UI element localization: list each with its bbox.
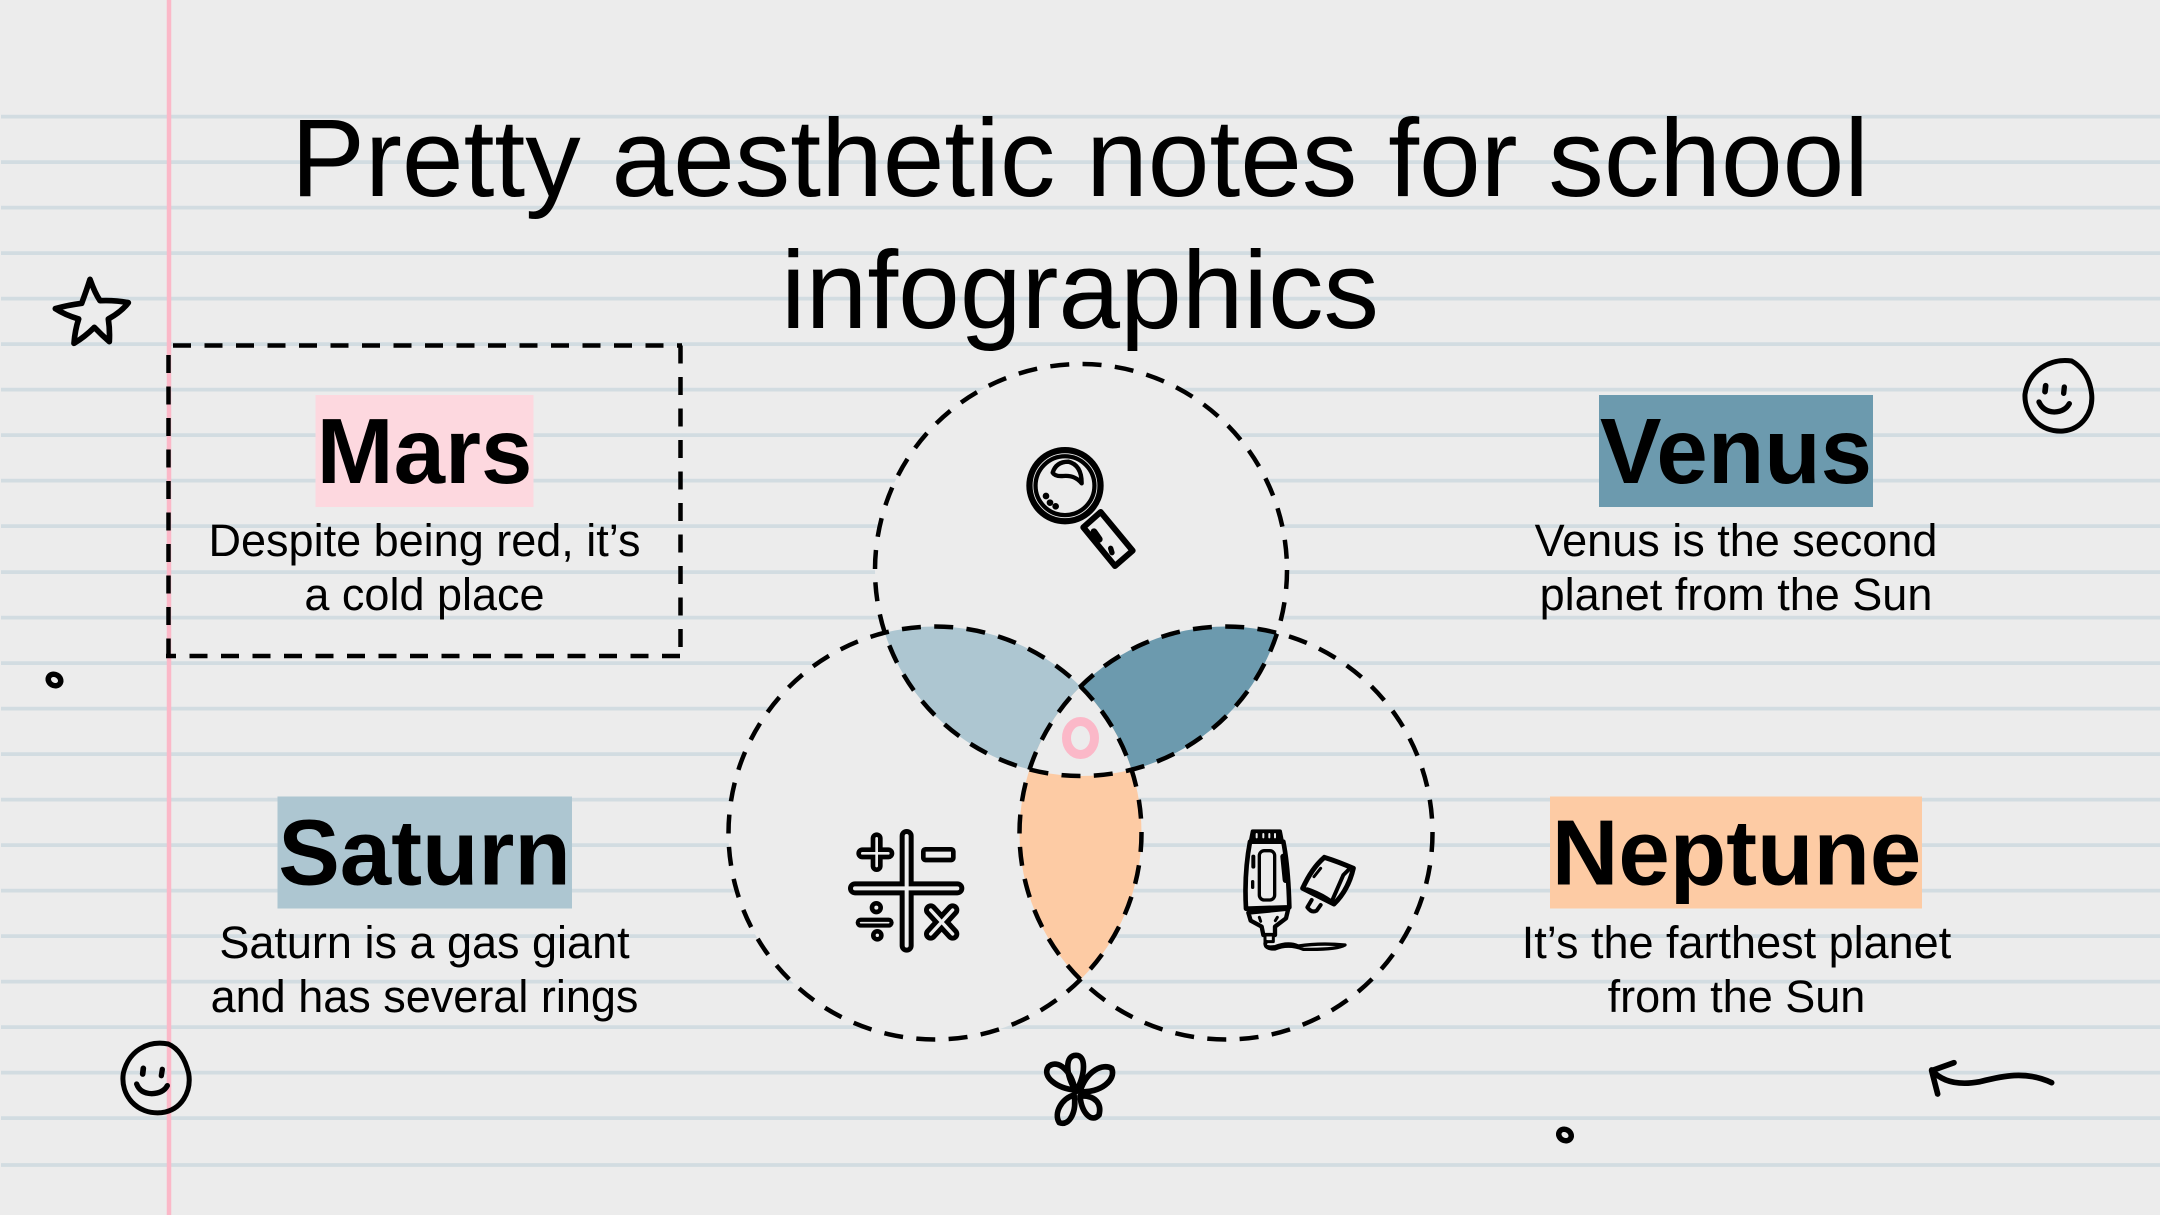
text: Neptune description: from the Sun [1608,971,1865,1022]
text: Mars description [209,515,640,620]
region: top and left overlap [886,626,1080,769]
text: Saturn description [211,917,638,1022]
icon: smiley bottom left [123,1043,189,1113]
icon: arrow [1932,1063,2052,1094]
text: Mars description: Despite being red, it’s [209,515,640,566]
text: Venus description [1535,515,1937,620]
text: Neptune description [1522,917,1952,1022]
icon: highlighter marker [1245,831,1353,949]
dashed circles [728,364,1432,1040]
text: Saturn description: Saturn is a gas giant [219,917,630,968]
icon: pink circle [1066,722,1094,754]
highlight: Mars [316,395,534,507]
text: Saturn description: and has several rings [211,971,638,1022]
title [291,96,1869,352]
panel: Saturn [211,796,638,1022]
icon: smiley top right [2025,360,2092,431]
icon: small circle left [46,672,63,688]
text: Venus description: Venus is the second [1535,515,1937,566]
title: Pretty aesthetic notes for school [291,96,1869,220]
region: triple overlap [1032,688,1131,776]
icon: star [55,279,128,343]
text: Venus description: planet from the Sun [1540,569,1932,620]
chart: Venn diagram [728,364,1432,1040]
icon: magnifying glass [1032,453,1133,566]
icon: small circle bottom [1557,1127,1573,1143]
text: Mars description: a cold place [304,569,545,620]
panel: Neptune [1522,796,1952,1022]
heading: Mars: Mars [317,399,532,503]
text: Neptune description: It’s the farthest planet [1522,917,1952,968]
heading: Venus: Venus [1600,399,1872,503]
heading: Neptune: Neptune [1552,800,1921,904]
heading: Saturn: Saturn [278,800,571,904]
icon: math symbols [855,836,957,946]
title: infographics [781,228,1379,352]
highlight: Neptune [1550,796,1922,908]
panel: Mars dashed box [166,346,682,656]
panel: Mars [209,395,640,620]
region: left and right overlap [1020,688,1142,979]
region: top and right overlap [1036,626,1278,768]
highlight: Saturn [278,796,572,908]
panel: Venus [1535,395,1937,620]
highlight: Venus [1599,395,1873,507]
icon: flower [1047,1055,1113,1123]
